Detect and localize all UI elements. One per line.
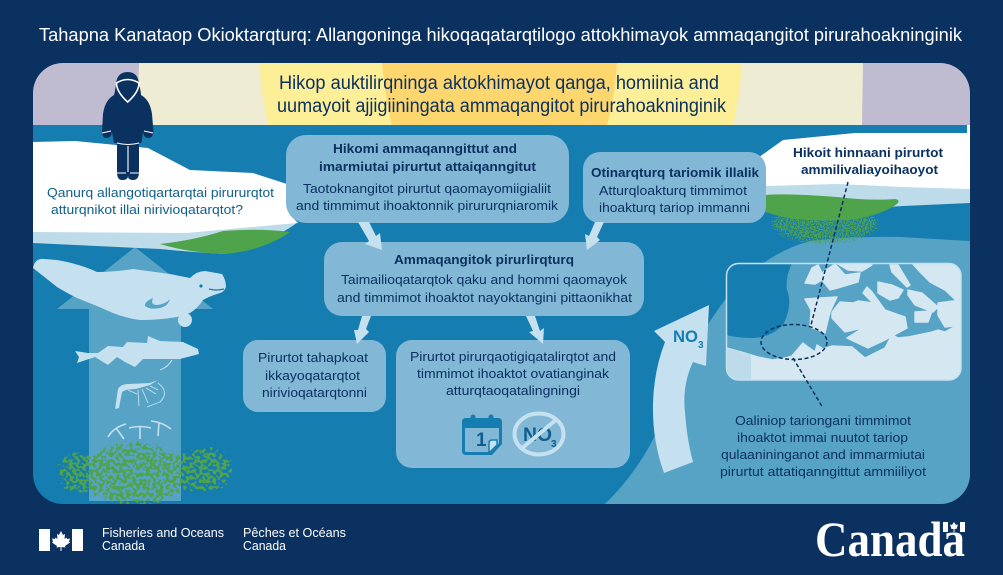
panel: salinity box: Otinarqturq tariomik illalik — [591, 165, 760, 180]
heading: Hikop auktilirqninga aktokhimayot qanga, homiinia and — [279, 73, 719, 94]
arrow: to right lower box — [526, 316, 544, 344]
panel: lower right box: timmimot ihoaktot ovatianginak — [417, 366, 609, 381]
icon: canadian flag — [39, 529, 83, 551]
panel: salinity box: Atturqloakturq timmimot — [599, 183, 747, 198]
panel: centre box: and timmimot ihoaktot nayoktangini pittaonikhat — [337, 290, 632, 305]
panel: surface box — [286, 135, 569, 223]
panel: lower left box — [243, 340, 386, 412]
text: map caption: Oaliniop tariongani timmimot — [735, 413, 911, 428]
lighter deep water — [605, 237, 970, 504]
text: map caption: pirurtut attatiqanngittut ammiiliyot — [720, 464, 926, 479]
icon: copepods — [108, 421, 171, 439]
right ice floe underside — [766, 184, 970, 207]
arrow: to centre box from right — [585, 222, 604, 250]
heading: uumayoit ajjigiiningata ammaqangitot pirurahoakninginik — [277, 96, 726, 117]
panel: centre box: Ammaqangitok pirurlirqturq — [394, 252, 574, 267]
upward energy arrow — [57, 247, 213, 501]
text: map caption — [720, 413, 926, 479]
panel: centre box: Taimailioqatarqtok qaku and hommi qaomayok — [341, 272, 627, 287]
NO3 subscript: 3 — [698, 340, 704, 351]
icon: no nitrate: NO — [523, 425, 552, 446]
dashed callout: ellipse and leader lines — [761, 182, 848, 408]
right ice edge — [967, 125, 970, 133]
text: right ice label — [793, 145, 944, 177]
panel: lower left box: nirivioqatarqtonni — [262, 385, 367, 400]
arrow: to left lower box — [354, 316, 371, 344]
panel: surface box: Taotoknangitot pirurtut qaomayomiigialiit — [303, 181, 551, 196]
panel: centre box — [324, 242, 644, 316]
icon: cod fish — [75, 336, 199, 370]
panel: lower left box: ikkayoqatarqtot — [265, 368, 360, 383]
panel: lower right box: Pirurtot pirurqaotigiqatalirqtot and — [410, 349, 616, 364]
map coast tint — [727, 348, 751, 381]
panel: surface box: and timmimut ihoaktonnik pirururqniaromik — [296, 198, 558, 213]
panel: salinity box — [583, 152, 766, 223]
phytoplankton: left bloom — [58, 440, 232, 504]
text: department name english — [102, 526, 224, 553]
title: Tahapna Kanataop Okioktarqturq: Allangoninga hikoqaqatarqtilogo attokhimayok ammaqangitot pirurahoakninginik — [39, 25, 963, 45]
arrow: to centre box from left — [358, 222, 382, 250]
land masses — [727, 263, 961, 381]
text: department name french: Canada — [243, 539, 286, 553]
map — [726, 263, 961, 381]
water — [33, 125, 970, 504]
left ice floe — [33, 141, 298, 233]
text: department name english: Fisheries and Oceans — [102, 526, 224, 540]
panel: lower right box: atturqtaoqatalingningi — [446, 383, 580, 398]
icon: beluga whale — [33, 259, 226, 327]
text: department name french — [243, 526, 346, 553]
heading — [277, 73, 726, 117]
icon: calendar: 1 — [476, 430, 487, 451]
text: left ice question: Qanurq allangotiqartarqtai pirururqtot — [47, 185, 274, 200]
person in parka — [102, 72, 154, 180]
text: right ice label: ammilivaliayoihaoyot — [801, 162, 939, 177]
icon: no nitrate: 3 — [551, 439, 557, 450]
icon: no nitrate — [514, 414, 564, 454]
phytoplankton: right bloom — [770, 215, 879, 246]
text: right ice label: Hikoit hinnaani pirurtot — [793, 145, 944, 160]
text: left ice question: atturqnikot illai nirivioqatarqtot? — [51, 202, 243, 217]
panel: lower right box — [396, 340, 630, 468]
panel: surface box: Hikomi ammaqanngittut and — [333, 141, 517, 156]
icon: calendar — [462, 414, 502, 455]
text: map caption: ihoaktot immai nuutot tariop — [737, 430, 908, 445]
right ice floe — [755, 133, 970, 189]
panel: salinity box: ihoakturq tariop immanni — [599, 200, 750, 215]
NO3 label: NO — [673, 327, 698, 346]
text: left ice question — [47, 185, 274, 217]
algae: right green — [765, 194, 899, 220]
icon: shrimp — [115, 380, 165, 409]
canada wordmark: Canada — [815, 511, 965, 567]
left ice floe underside — [33, 222, 298, 254]
text: department name english: Canada — [102, 539, 145, 553]
panel: lower left box: Pirurtot tahapkoat — [258, 350, 368, 365]
sky — [33, 63, 970, 126]
deep water on map — [726, 263, 792, 338]
panel: main scene — [33, 63, 970, 510]
icon: wordmark flag — [943, 522, 965, 532]
icon: NO3 rising arrow — [653, 305, 709, 473]
algae: left green — [160, 230, 290, 254]
text: department name french: Pêches et Océans — [243, 526, 346, 540]
text: map caption: qulaanininganot and immarmiutai — [721, 447, 925, 462]
panel: surface box: imarmiutai pirurtut attaiqanngitut — [319, 159, 537, 174]
